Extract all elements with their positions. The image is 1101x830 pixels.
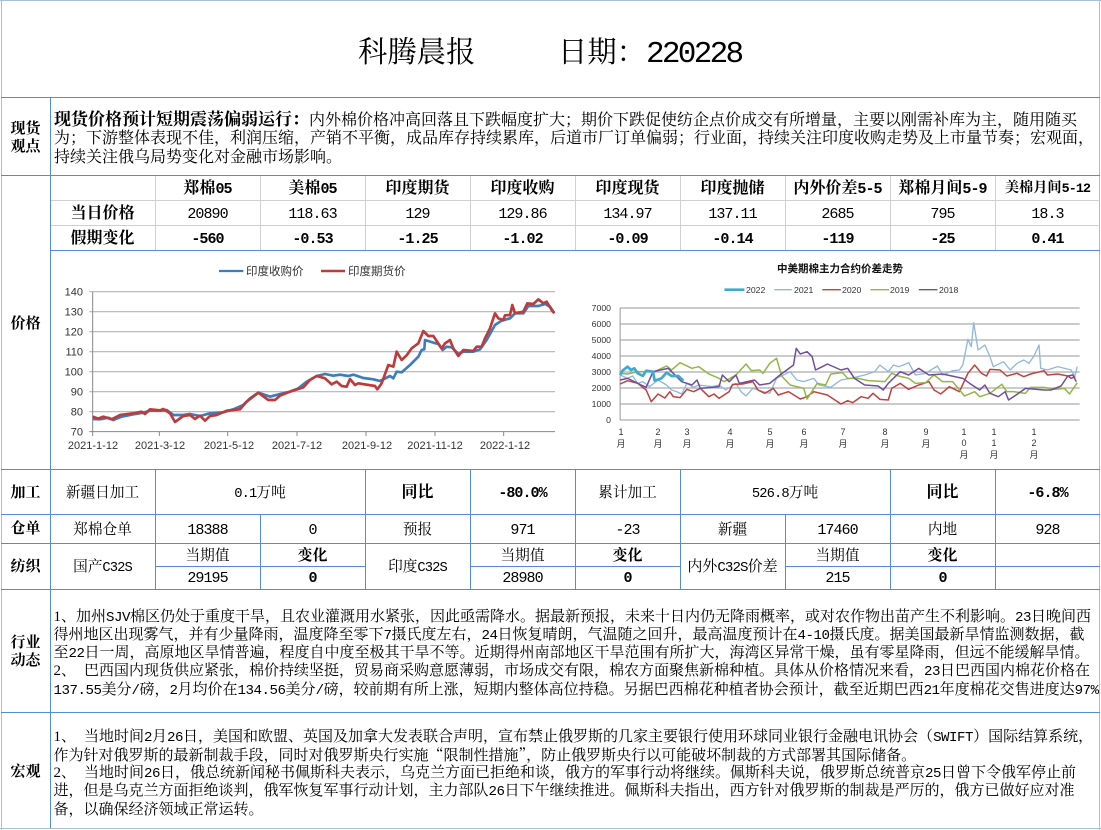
holiday change row: 0.41 — [1031, 230, 1064, 248]
y axis labels: 80 — [71, 406, 83, 418]
industry news text: 1、加州SJV棉区仍处于重度干旱，且农业灌溉用水紧张，因此亟需降水。据最新预报，未来十日内仍无降雨概率，或对农作物出苗产生不利影响。23日晚间西 — [54, 608, 1091, 626]
x axis labels: 2021-9-12 — [342, 440, 392, 452]
x axis month labels: 1 — [991, 427, 997, 437]
x axis month labels: 7 — [840, 427, 846, 437]
legend labels: 2019 — [890, 285, 909, 295]
x axis month labels: 5 — [767, 427, 773, 437]
x axis labels: 2021-11-12 — [407, 440, 463, 452]
spot view label: 现货 — [10, 121, 40, 137]
panel: textile row — [10, 547, 958, 587]
x axis month labels: 1 — [618, 427, 624, 437]
x axis labels — [68, 440, 530, 452]
panel: processing row: 同比 — [401, 484, 434, 501]
y axis labels: 2000 — [592, 383, 611, 393]
y axis labels: 130 — [65, 306, 83, 318]
panel: warehouse receipts row: 971 — [510, 521, 535, 539]
panel: warehouse receipts row: 18388 — [187, 521, 228, 539]
current price row: 118.63 — [288, 205, 337, 223]
y axis labels: 3000 — [592, 367, 611, 377]
table header row: 郑棉月间5-9 — [898, 180, 987, 198]
legend swatch: futures — [321, 270, 345, 272]
table header row: 美棉05 — [288, 180, 337, 198]
line chart: China-US cotton spread — [592, 262, 1080, 460]
y axis labels: 0 — [606, 415, 611, 425]
panel: textile row: 29195 — [187, 569, 228, 587]
table header row: 印度期货 — [385, 180, 450, 197]
panel: processing row: 同比 — [926, 484, 958, 501]
x axis month labels: 2 — [655, 427, 661, 437]
industry news label — [10, 634, 40, 668]
panel: warehouse receipts row: 0 — [308, 521, 317, 539]
current price row: 20890 — [187, 205, 228, 223]
legend — [246, 264, 406, 278]
x axis month labels: 月 — [921, 439, 931, 449]
current price row: 134.97 — [603, 205, 652, 223]
spot view text: 现货价格预计短期震荡偏弱运行：内外棉价格冲高回落且下跌幅度扩大；期价下跌促使纺企点价成交有所增量，主要以刚需补库为主，随用随买 — [54, 110, 1077, 128]
y axis labels — [65, 286, 83, 438]
y axis labels: 110 — [65, 346, 83, 358]
holiday change row: -0.14 — [712, 230, 753, 248]
panel: warehouse receipts row — [10, 520, 1060, 539]
panel: processing row: -6.8% — [1027, 484, 1068, 502]
x axis month labels: 月 — [765, 439, 775, 449]
table header row: 内外价差5-5 — [793, 180, 882, 198]
holiday change row: -25 — [930, 230, 955, 248]
panel: warehouse receipts row: 预报 — [403, 522, 432, 538]
spot view label — [10, 120, 40, 155]
x axis labels: 2021-7-12 — [272, 440, 322, 452]
warehouse label: 仓单 — [10, 521, 40, 537]
line chart: India procurement vs futures price — [65, 264, 556, 452]
panel: processing row: 新疆日加工 — [66, 485, 139, 501]
textile label: 纺织 — [10, 559, 40, 575]
processing label: 加工 — [10, 485, 40, 501]
current price row: 137.11 — [708, 205, 757, 223]
panel: price table — [70, 179, 1090, 248]
y axis labels: 1000 — [592, 399, 611, 409]
industry news text: 2、 巴西国内现货供应紧张，棉价持续坚挺，贸易商采购意愿薄弱，市场成交有限，棉农方面聚焦新棉种植。具体从价格情况来看，23日巴西国内棉花价格在 — [54, 663, 1090, 680]
x axis labels: 2021-1-12 — [68, 440, 118, 452]
current price row: 129 — [405, 205, 430, 223]
y axis labels: 100 — [65, 366, 83, 378]
x axis month labels: 月 — [959, 450, 969, 460]
industry news label: 动态 — [10, 652, 40, 668]
x axis month labels: 0 — [961, 438, 967, 448]
x axis month labels: 3 — [684, 427, 690, 437]
industry news text — [54, 608, 1100, 699]
panel: warehouse receipts row: 郑棉仓单 — [73, 522, 132, 538]
industry news text: 得州地区出现雾气，并有少量降雨，温度降至零下7摄氏度左右，24日恢复晴朗，气温随之回升，最高温度预计在4-10摄氏度。据美国最新旱情监测数据，截 — [54, 627, 1085, 644]
panel: textile row: 215 — [825, 569, 850, 587]
panel: industry news — [10, 608, 1100, 699]
table header row: 美棉月间5-12 — [1005, 180, 1090, 197]
y axis labels: 120 — [65, 326, 83, 338]
holiday change row: -560 — [191, 230, 224, 248]
chart title: 中美期棉主力合约价差走势 — [777, 262, 903, 275]
series: 2022 — [620, 367, 683, 381]
panel: textile row: 当期值 — [500, 548, 544, 564]
current price row: 18.3 — [1031, 205, 1064, 223]
panel: processing row: 0.1万吨 — [234, 485, 286, 502]
y axis labels: 140 — [65, 286, 83, 298]
current price row: 当日价格 — [70, 205, 134, 222]
holiday change row: -0.09 — [607, 230, 648, 248]
spot view label: 观点 — [10, 139, 40, 155]
panel: textile row: 变化 — [297, 548, 328, 564]
x axis month labels: 月 — [838, 439, 848, 449]
y axis labels — [592, 303, 611, 425]
legend swatch: procurement — [219, 267, 243, 274]
table header row: 印度抛储 — [700, 180, 764, 197]
x axis month labels: 月 — [880, 439, 890, 449]
macro label: 宏观 — [10, 764, 40, 780]
y axis labels: 4000 — [592, 351, 611, 361]
x axis month labels: 月 — [616, 439, 626, 449]
panel: warehouse receipts row: 928 — [1035, 521, 1060, 539]
x axis month labels: 9 — [923, 427, 929, 437]
panel: processing row: 526.8万吨 — [752, 485, 818, 502]
panel: processing row: 累计加工 — [598, 485, 657, 501]
holiday change row: 假期变化 — [70, 230, 134, 247]
spot view text — [54, 110, 1094, 166]
spot view text: 为；下游整体表现不佳，利润压缩，产销不平衡，成品库存持续累库，后道市厂订单偏弱；行业面，持续关注印度收购走势及上市量节奏；宏观面， — [54, 130, 1094, 146]
series: 2021 — [620, 323, 1077, 396]
x axis month labels: 月 — [653, 439, 663, 449]
series: 2018 — [620, 348, 1076, 400]
macro text — [54, 728, 1093, 818]
legend: 印度收购价 — [246, 264, 304, 278]
x axis month labels: 1 — [1031, 427, 1037, 437]
legend: 印度期货价 — [348, 264, 406, 278]
panel: warehouse receipts row: 内地 — [928, 522, 957, 538]
macro text: 作为针对俄罗斯的最新制裁手段，同时对俄罗斯央行实施“限制性措施”，防止俄罗斯央行以可能破坏制裁的方式部署其国际储备。 — [54, 744, 916, 765]
panel: textile row: 内外C32S价差 — [687, 559, 778, 576]
series: India futures price — [93, 299, 554, 422]
panel: textile row: 国产C32S — [73, 559, 132, 576]
panel: textile row: 印度C32S — [388, 559, 447, 576]
current price row: 2685 — [821, 205, 854, 223]
panel: textile row: 28980 — [502, 569, 543, 587]
series: 2019 — [620, 358, 1077, 399]
panel: textile row: 变化 — [927, 548, 958, 564]
panel: processing row: -80.0% — [498, 484, 547, 502]
y axis labels: 5000 — [592, 335, 611, 345]
x axis month labels: 月 — [725, 439, 735, 449]
x axis labels: 2022-1-12 — [480, 440, 530, 452]
current price row: 795 — [930, 205, 955, 223]
x axis month labels: 8 — [882, 427, 888, 437]
spot view text: 持续关注俄乌局势变化对金融市场影响。 — [54, 148, 342, 166]
series: 2020 — [620, 365, 1075, 404]
panel: textile row: 0 — [938, 569, 947, 587]
x axis month labels: 月 — [799, 439, 809, 449]
panel: textile row: 0 — [308, 569, 317, 587]
x axis month labels — [616, 427, 1039, 460]
report name: 科腾晨报 — [358, 37, 475, 69]
price section label: 价格 — [10, 316, 40, 332]
x axis month labels: 月 — [989, 450, 999, 460]
table header row: 印度收购 — [490, 180, 554, 197]
industry news label: 行业 — [10, 634, 40, 650]
macro text: 2、 当地时间26日，俄总统新闻秘书佩斯科夫表示，乌克兰方面已拒绝和谈，俄方的军事行动将继续。佩斯科夫说，俄罗斯总统普京25日曾下令俄军停止前 — [54, 765, 1076, 782]
panel: warehouse receipts row: -23 — [615, 521, 640, 539]
x axis month labels: 2 — [1031, 438, 1037, 448]
macro text: 进，但是乌克兰方面拒绝谈判，俄军恢复军事行动计划，主力部队26日下午继续推进。佩斯科夫指出，西方针对俄罗斯的制裁是严厉的，俄方已做好应对准 — [54, 783, 1075, 800]
x axis month labels: 6 — [801, 427, 807, 437]
title — [358, 36, 742, 72]
y axis labels: 6000 — [592, 319, 611, 329]
legend labels: 2022 — [746, 285, 765, 295]
holiday change row — [70, 229, 1064, 248]
industry news text: 137.55美分/磅，2月均价在134.56美分/磅，较前期有所上涨，短期内整体高位持稳。另据巴西棉花种植者协会预计，截至近期巴西21年度棉花交售进度达97% — [54, 682, 1099, 699]
table header row — [183, 179, 1090, 198]
industry news text: 至22日一周，高原地区旱情普遍，程度自中度至极其干旱不等。近期得州南部地区干旱范围有所扩大，海湾区异常干燥，虽有零星降雨，但远不能缓解旱情。 — [54, 645, 1090, 662]
panel: warehouse receipts row: 新疆 — [718, 522, 747, 538]
panel: processing row — [10, 483, 1069, 502]
macro text: 1、 当地时间2月26日，美国和欧盟、英国及加拿大发表联合声明，宣布禁止俄罗斯的几家主要银行使用环球同业银行金融电讯协会（SWIFT）国际结算系统， — [54, 728, 1093, 746]
x axis month labels: 4 — [727, 427, 733, 437]
report date: 日期：220228 — [558, 37, 741, 72]
series: India procurement price — [93, 304, 554, 420]
holiday change row: -1.02 — [502, 230, 543, 248]
holiday change row: -1.25 — [397, 230, 438, 248]
legend labels: 2020 — [842, 285, 861, 295]
x axis month labels: 1 — [961, 427, 967, 437]
table header row: 郑棉05 — [183, 180, 232, 198]
panel: spot view — [10, 110, 1094, 166]
y axis labels: 7000 — [592, 303, 611, 313]
panel: textile row: 0 — [623, 569, 632, 587]
current price row: 129.86 — [498, 205, 547, 223]
x axis labels: 2021-5-12 — [204, 440, 254, 452]
x axis labels: 2021-3-12 — [135, 440, 185, 452]
table header row: 印度现货 — [595, 180, 660, 197]
holiday change row: -119 — [821, 230, 854, 248]
y axis labels: 90 — [71, 386, 83, 398]
legend labels: 2021 — [794, 285, 813, 295]
legend labels: 2018 — [939, 285, 958, 295]
current price row — [70, 204, 1064, 223]
legend swatches — [724, 286, 937, 294]
macro text: 备，以确保经济领域正常运转。 — [54, 802, 264, 818]
y axis labels: 70 — [71, 426, 83, 438]
panel: textile row: 当期值 — [816, 548, 859, 564]
x axis month labels: 1 — [991, 438, 997, 448]
panel: warehouse receipts row: 17460 — [817, 521, 858, 539]
panel: macro — [10, 728, 1093, 818]
x axis month labels: 月 — [682, 439, 692, 449]
x axis month labels: 月 — [1029, 450, 1039, 460]
holiday change row: -0.53 — [292, 230, 333, 248]
legend labels — [746, 285, 958, 295]
panel: textile row: 当期值 — [186, 548, 229, 564]
panel: textile row: 变化 — [612, 548, 642, 564]
